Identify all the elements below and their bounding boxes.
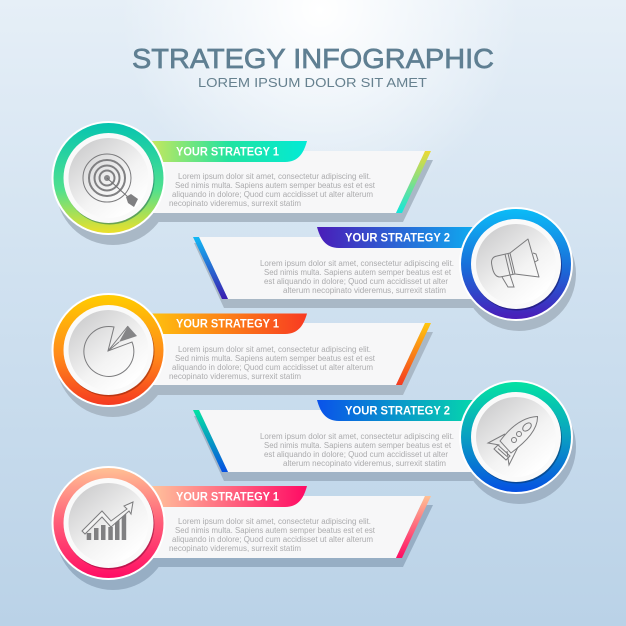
panel: strategy 5 growth <box>52 466 433 590</box>
circle badge <box>459 207 573 321</box>
tab heading <box>150 314 307 334</box>
icon: target <box>83 154 138 207</box>
body text: alterum necopinato videremus, surrexit statim <box>283 286 446 295</box>
tab heading <box>150 141 307 162</box>
body text: Sed nimis multa. Sapiens autem semper beatus est et <box>264 268 452 277</box>
body text <box>260 432 454 468</box>
icon: rocket <box>488 416 538 465</box>
body text: est aliquando in dolore; Quod cum accidisset ut alter <box>264 277 448 286</box>
body text: alterum necopinato videremus, surrexit statim <box>283 459 446 468</box>
body text: Lorem ipsum dolor sit amet, consectetur adipiscing elit. <box>178 345 371 354</box>
title: STRATEGY INFOGRAPHIC <box>132 43 494 74</box>
body text: Lorem ipsum dolor sit amet, consectetur adipiscing elit. <box>260 432 454 441</box>
body text: Lorem ipsum dolor sit amet, consectetur adipiscing elit. <box>178 517 371 526</box>
panel: strategy 1 target <box>52 121 433 245</box>
body text: necopinato videremus, surrexit statim <box>169 372 301 381</box>
tab heading <box>150 486 307 507</box>
subtitle: LOREM IPSUM DOLOR SIT AMET <box>198 75 427 90</box>
body text: aliquando in dolore; Quod cum accidisset ut alter alterum <box>172 190 373 199</box>
icon: megaphone <box>492 239 539 287</box>
circle badge <box>52 121 166 235</box>
body text: Lorem ipsum dolor sit amet, consectetur adipiscing elit. <box>178 172 371 181</box>
body text: Sed nimis multa. Sapiens autem semper beatus est et est <box>175 354 376 363</box>
tab heading: YOUR STRATEGY 1 <box>176 492 280 504</box>
body text: aliquando in dolore; Quod cum accidisset ut alter alterum <box>172 363 373 372</box>
body text: necopinato videremus, surrexit statim <box>169 199 301 208</box>
icon: growth chart <box>82 502 133 540</box>
tab heading <box>317 400 480 421</box>
body text: aliquando in dolore; Quod cum accidisset ut alter alterum <box>172 535 373 544</box>
body text <box>169 345 376 381</box>
body text: est aliquando in dolore; Quod cum accidisset ut alter <box>264 450 448 459</box>
circle badge <box>52 466 166 580</box>
tab heading: YOUR STRATEGY 1 <box>176 318 280 330</box>
body text: Sed nimis multa. Sapiens autem semper beatus est et <box>264 441 452 450</box>
tab heading <box>317 227 480 248</box>
body text <box>169 517 376 553</box>
panel: strategy 4 rocket <box>193 380 576 504</box>
circle badge <box>52 293 166 407</box>
tab heading: YOUR STRATEGY 2 <box>345 232 450 244</box>
icon: pie chart <box>84 326 137 376</box>
body text: necopinato videremus, surrexit statim <box>169 544 301 553</box>
body text <box>260 259 454 295</box>
body text: Lorem ipsum dolor sit amet, consectetur adipiscing elit. <box>260 259 454 268</box>
panel: strategy 3 pie <box>52 293 433 417</box>
tab heading: YOUR STRATEGY 1 <box>176 146 280 158</box>
body text: Sed nimis multa. Sapiens autem semper beatus est et est <box>175 526 376 535</box>
circle badge <box>459 380 573 494</box>
panel: strategy 2 megaphone <box>193 207 576 331</box>
body text <box>169 172 376 208</box>
tab heading: YOUR STRATEGY 2 <box>345 406 450 418</box>
body text: Sed nimis multa. Sapiens autem semper beatus est et est <box>175 181 376 190</box>
